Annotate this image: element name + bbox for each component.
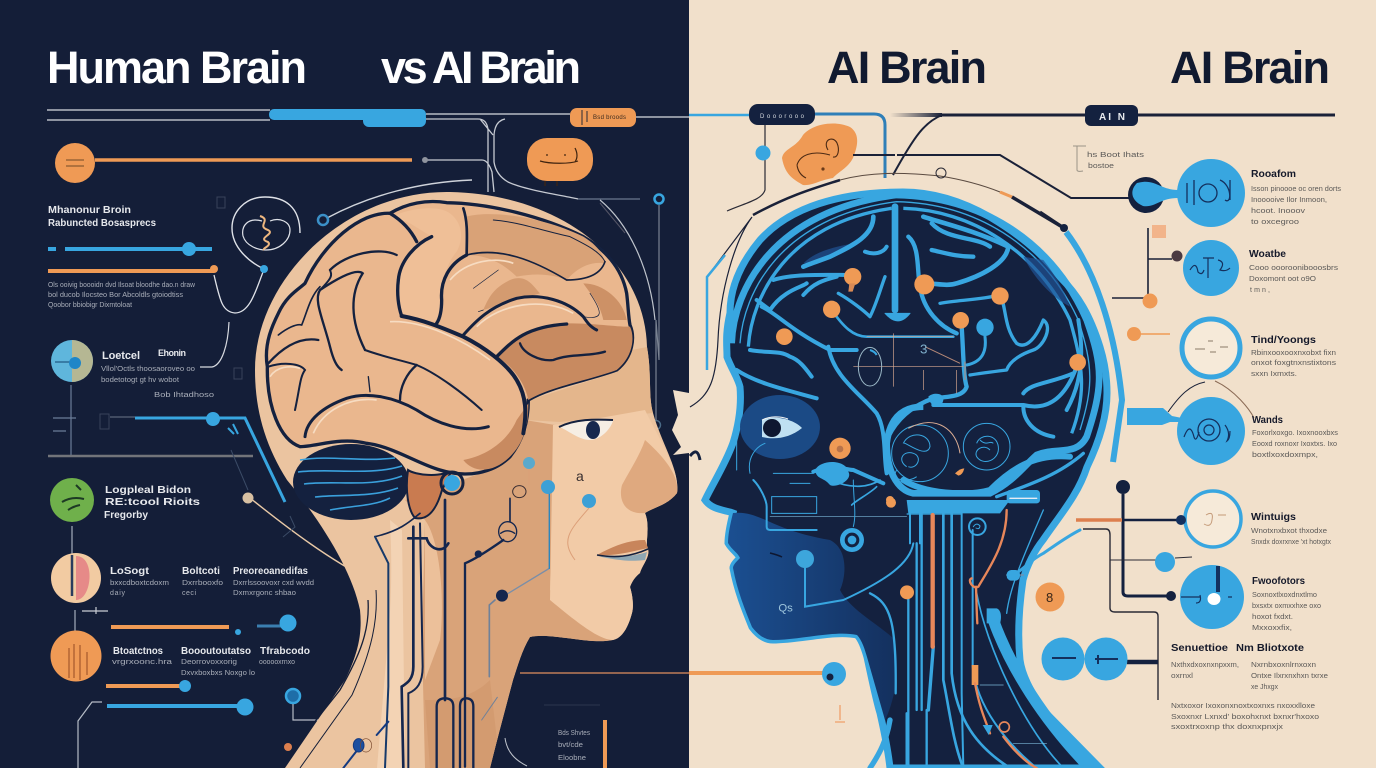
label pill: right one: Dooorooo [760,114,805,120]
spirals [892,425,948,482]
title: Human Brain vs AI Brain: vs AI Brain [381,42,581,93]
title: AI Brain right: AI Brain [1170,42,1330,93]
cerebellum [293,444,409,520]
text block: Wintuigs [1251,511,1331,546]
slider: orange [48,265,218,273]
text block: Wands: Eooxd roxnoxr Ixoxtxs. Ixo [1252,441,1337,448]
text block: Fwoofotors: Fwoofotors [1252,575,1305,587]
text block: Wintuigs: Wnotxnxbxot thxodxe [1251,528,1327,535]
text block: logical brain: Vllol'Octls thoosaoroveo oo [101,366,195,373]
human head silhouette [255,192,677,768]
text block: Woatbe: Cooo oooroonibooosbrs [1249,265,1339,272]
face light [550,410,677,640]
text block: Woatbe [1249,248,1339,294]
text block: Fwoofotors [1252,575,1321,632]
text row: columns one: daiy [110,590,126,597]
text block: logical brain group: Fregorby [104,509,148,521]
text block: Woatbe: Woatbe [1249,248,1286,260]
label pill: AI N: AI N [1099,112,1125,123]
text block: bottom right description: Nxtxoxor Ixoxonxnoxtxoxnxs nxoxxlloxe [1171,703,1315,710]
face and neck mid-tone [405,420,612,768]
connector: vertical node line [72,526,75,632]
nose shade [621,440,677,513]
icon: orange circle with slider [55,143,412,183]
outer blue arc of AI head [1040,212,1122,462]
text block: left description: Qoobor bbiobigr Dixmtoloat [48,302,132,309]
AI head silhouette [705,192,1107,768]
text block: Senuettioe and Nm Bliotxots: Nm Bliotxote [1236,642,1304,654]
circle icon: Woatbe [1183,240,1239,296]
text block: Fwoofotors: bxsxtx oxmxxhxe oxo [1252,603,1321,610]
text block: logical brain group: RE:tcool Rioits [105,496,200,508]
text block: Wintuigs: Wintuigs [1251,511,1296,523]
neck network: Qs [778,603,793,615]
icon: orange speech bubble [527,138,593,186]
text block: Tind/Yoongs: onxot foxgtnxnstixtons [1251,360,1337,367]
knob with orange connector [689,662,846,722]
blue connector to circle 4 [1127,381,1254,425]
icon: thin wire and node [231,450,370,580]
wires over AI head [753,115,1135,228]
text block: Rooafom: Inooooive Ilor Inmoon, [1251,197,1327,204]
text row: columns one: Dxmxrgonc shbao [233,590,296,597]
slider: blue [48,242,212,256]
top connector lines, left [47,109,689,199]
text block: Fwoofotors: Soxnoxtlxoxdnxtlmo [1252,592,1317,599]
veins [737,207,1083,497]
text row: columns two [112,645,310,677]
human brain cortex [266,202,632,474]
text block: Rooafom: Isson pinoooe oc oren dorts [1251,186,1342,193]
thin divider mark and left bottom callout: Eloobne [558,755,586,762]
icon: right vertical connector [578,194,664,430]
text block: left description: Ols ooivig boooidn dvd Ilsoat bloodhe dao.n draw [48,282,196,289]
text block: Woatbe: tmn, [1250,287,1270,294]
sliders: bottom [78,680,322,768]
orange pin [1127,327,1170,341]
text block: Woatbe: Doxomont oot o9O [1249,276,1317,283]
head nodes [441,457,596,560]
text block: Rooafom [1251,168,1342,226]
label pill: left [570,108,636,127]
panel: human brain background [0,0,689,768]
orange nodes [776,268,1086,504]
text row: columns one: Dxrrlssoovoxr cxd wvdd [233,580,314,587]
text block: logical brain: Loetcel [102,350,140,362]
text block: Senuettioe and Nm Bliotxots: Nxrnbxoxnlrnxoxn [1251,662,1316,669]
text block: Senuettioe and Nm Bliotxots: Nxthxdxoxnxnpxxm, [1171,662,1239,669]
icon: brain in ring with cable [214,197,300,313]
text row: columns one: Boltcoti [182,565,220,577]
label pill: right one [749,104,815,125]
blue riser [815,114,885,178]
text block: Fwoofotors: Mxxoxxfix, [1252,625,1292,632]
text block: bottom right description: sxoxtrxoxnp thx doxnxpnxjx [1171,724,1284,731]
text block: logical brain [101,322,242,399]
thin divider mark and left bottom callout [505,673,689,768]
face blue shading [728,513,897,720]
text row: columns two: oooooxrnxo [259,659,295,666]
circle icon: Wintuigs [1185,491,1241,547]
circle icon: Wands [1177,397,1245,465]
icon: orange blob with ear [782,124,857,185]
thin divider mark and left bottom callout: Bds Shvtes [558,730,590,737]
text block: Senuettioe and Nm Bliotxots: Senuettioe [1171,642,1228,654]
eye [559,420,613,440]
text block: Wands: Foxorlxoxgo. Ixoxnooxbxs [1252,430,1339,437]
label pill: left: Bsd broods [593,115,626,121]
text row: columns one: ceci [182,590,196,597]
lips [597,540,648,561]
shaded lobes [497,323,632,400]
panel: AI brain background [689,0,1376,768]
text row: columns one: LoSogt [110,565,150,577]
text block: Tind/Yoongs: Rbinxooxooxnxobxt fixn [1251,350,1336,357]
text block: left description: bol ducob Ilocsteo Bor Abcoldls gtoiodtiss [48,292,184,299]
text block: Fwoofotors: hoxot fxdxt. [1252,614,1293,621]
divider bar [48,455,253,457]
text block: left description [48,282,196,309]
icon: green circle [50,478,94,522]
text block: logical brain: Bob Ihtadhoso [154,392,214,399]
sliders: orange with blue knob [82,607,296,635]
AI brain network: 3 [920,341,927,356]
text block: human brain heading: Rabuncted Bosasprecs [48,217,156,229]
shell rings [732,195,1099,493]
text block: Wands: boxtlxoxdoxmpx, [1252,452,1318,459]
icon: peach circle [51,553,101,603]
circle icon: Tind/Yoongs [1182,319,1240,377]
text note top right: bostoe [1088,163,1114,170]
text block: logical brain: bodetotogt gt hv wobot [101,377,179,384]
slider with connector: blue [53,385,285,502]
icon: paired blue circles [1042,638,1128,680]
text row: columns one [110,565,314,597]
text block: Senuettioe and Nm Bliotxots: oxrnxl [1171,673,1194,680]
title: AI Brain right: AI Brain [827,42,987,93]
icon: connector head to circle 1 [1128,177,1178,213]
wiring: lower right [1076,480,1192,700]
label pill: AI N [1085,105,1138,126]
text block: Tind/Yoongs [1251,334,1337,378]
text note top right: hs Boot Ihats [1087,152,1145,159]
text block: Rooafom: Rooafom [1251,168,1296,180]
AI nose and cable outside [690,125,765,460]
icon: orange badge: 8 [1046,590,1053,605]
text row: columns one: Preoreoanedifas [233,565,308,577]
text block: Rooafom: to oxcegroo [1251,219,1299,226]
text row: columns two: Boooutoutatso [181,645,251,657]
text block: Tind/Yoongs: Tind/Yoongs [1251,334,1316,346]
circle icon: Fwoofotors [1180,565,1244,629]
text block: Rooafom: hcoot. Inooov [1251,208,1306,215]
neck network [753,480,1090,768]
text block: human brain heading: Mhanonur Broin [48,204,131,216]
text block: Wands [1252,414,1339,459]
head nodes: a [576,468,584,484]
icon: blue dot [756,146,770,160]
text row: columns two: Deorrovoxxorig [181,659,237,666]
text block: bottom right description [1171,703,1319,731]
text block: human brain heading [48,204,156,229]
thin divider mark and left bottom callout: bvt/cde [558,742,583,749]
text row: columns two: vrgrxoonc.hra [112,659,172,666]
text note top right [1073,146,1145,171]
title: AI Brain right [827,42,1330,93]
brain stem [407,470,452,518]
AI brain network [732,195,1099,504]
title: Human Brain vs AI Brain [47,42,581,93]
icon: blue teal circle [51,340,93,382]
text block: Wintuigs: Snxdx doxrxnxe 'xt hotxgtx [1251,539,1331,546]
text block: Senuettioe and Nm Bliotxots: xe Jhxgx [1251,684,1278,691]
text block: Senuettioe and Nm Bliotxots: Ontxe Ilxrxnxhxn txrxe [1251,673,1328,680]
text row: columns two: Btoatctnos [113,645,163,657]
circle icon: Rooafom [1177,159,1245,227]
text block: Senuettioe and Nm Bliotxots [1171,642,1328,691]
sulci [268,208,605,437]
icon: orange badge [1036,582,1064,612]
title: Human Brain vs AI Brain: Human Brain [47,42,307,93]
text block: logical brain group [104,484,200,521]
cream tear at divider [672,390,689,455]
text row: columns one: bxxcdboxtcdoxm [110,580,169,587]
center circuit [853,333,963,393]
head wiring [343,486,549,768]
text block: Tind/Yoongs: sxxn Ixmxts. [1251,371,1297,378]
text block: bottom right description: Sxoxnxr Lxnxd' boxohxnxt bxnxr'hxoxo [1171,714,1319,721]
text block: logical brain: Ehonin [158,348,186,358]
icon: connector node [318,180,472,225]
highlights [270,260,573,433]
neck highlight [377,520,405,768]
text block: logical brain group: Logpleal Bidon [105,484,191,496]
icon: orange circle [50,630,102,682]
top bar, right [689,113,1335,117]
node tree to circle 2 [1112,225,1182,308]
text block: Wands: Wands [1252,414,1283,426]
text row: columns one: Dxrrbooxfo [182,580,223,587]
text row: columns two: Tfrabcodo [260,645,310,657]
text row: columns two: Dxvxboxbxs Noxgo lo [181,670,255,677]
